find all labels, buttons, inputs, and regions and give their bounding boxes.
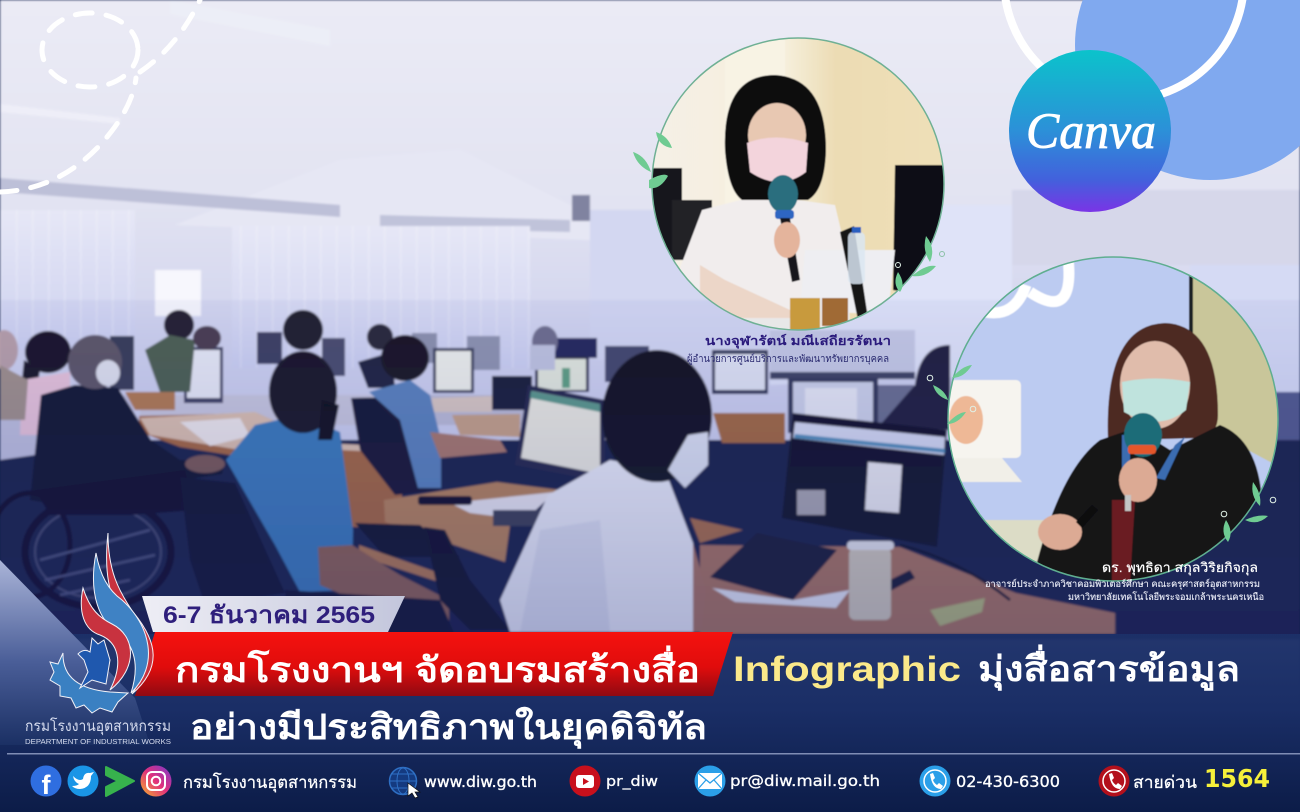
icon: facebook bbox=[30, 766, 62, 800]
footer: email: pr@diw.mail.go.th bbox=[730, 772, 880, 790]
speaker 2 caption: มหาวิทยาลัยเทคโนโลยีพระจอมเกล้าพระนครเหนือ bbox=[1068, 591, 1264, 603]
portrait: speaker 2 bbox=[945, 250, 1285, 590]
speaker 2 caption: อาจารย์ประจำภาควิชาคอมพิวเตอร์ศึกษา คณะครุศาสตร์อุตสาหกรรม bbox=[985, 578, 1260, 590]
seated participants bbox=[0, 335, 712, 635]
speaker 1 caption: ผู้อำนวยการศูนย์บริการและพัฒนาทรัพยากรบุคคล bbox=[687, 353, 889, 365]
footer: phone number: 02-430-6300 bbox=[956, 772, 1060, 791]
decorative blue circle bbox=[1075, 0, 1300, 180]
department logo bbox=[50, 533, 153, 713]
back row of monitors and people bbox=[0, 310, 950, 435]
curtains bbox=[0, 210, 530, 368]
icon: twitter bbox=[68, 766, 98, 796]
dark under-desk base bbox=[0, 440, 1300, 640]
speaker 2 caption: ดร. พุทธิดา สกุลวิริยกิจกุล bbox=[1102, 560, 1258, 576]
Canva logo: Canva bbox=[1026, 104, 1156, 160]
date banner bbox=[142, 596, 405, 632]
decorative white ring bbox=[1004, 0, 1244, 100]
footer: department name: กรมโรงงานอุตสาหกรรม bbox=[183, 772, 357, 793]
speaker 1 caption bbox=[687, 333, 891, 365]
icon: instagram bbox=[140, 766, 172, 796]
headline continued: มุ่งสื่อสารข้อมูล bbox=[978, 644, 1240, 691]
front monitors and desk objects bbox=[515, 385, 1010, 626]
icon: phone bbox=[920, 766, 950, 796]
desks bbox=[125, 392, 1115, 634]
decorative dashed circle motif bbox=[0, 0, 200, 192]
headline red banner: กรมโรงงานฯ จัดอบรมสร้างสื่อ bbox=[175, 645, 700, 690]
bottom navy band bbox=[0, 634, 1300, 812]
ceiling and ducts bbox=[0, 0, 590, 240]
footer: hotline number: 1564 bbox=[1204, 764, 1270, 793]
portrait ring 1 bbox=[652, 38, 944, 330]
speaker 1 caption: นางจุฬารัตน์ มณีเสถียรรัตนา bbox=[705, 333, 891, 349]
Canva logo bbox=[1009, 50, 1171, 212]
department name: กรมโรงงานอุตสาหกรรม bbox=[25, 717, 171, 736]
department name bbox=[25, 717, 171, 746]
headline red banner bbox=[135, 632, 733, 696]
icon: globe with cursor bbox=[390, 768, 420, 798]
icon: play store bbox=[106, 767, 134, 796]
leaves around portrait 2 bbox=[927, 365, 1276, 542]
icon: facebook: f bbox=[42, 770, 52, 800]
icon: youtube bbox=[570, 766, 600, 796]
footer: website: www.diw.go.th bbox=[424, 773, 537, 791]
footer: hotline label: สายด่วน bbox=[1133, 773, 1197, 792]
footer: youtube handle: pr_diw bbox=[606, 774, 658, 790]
headline second line: อย่างมีประสิทธิภาพในยุคดิจิทัล bbox=[190, 706, 707, 749]
speaker 2 caption bbox=[985, 560, 1264, 603]
blue photo tint bbox=[0, 300, 1300, 640]
headline Infographic: Infographic bbox=[733, 650, 961, 689]
light wedge at lower left bbox=[0, 560, 150, 745]
icon: hotline bbox=[1098, 766, 1130, 796]
portrait: speaker 1 bbox=[650, 36, 950, 332]
portrait ring 2 bbox=[948, 257, 1278, 581]
date banner: 6-7 ธันวาคม 2565 bbox=[163, 602, 375, 629]
department name: DEPARTMENT OF INDUSTRIAL WORKS bbox=[25, 737, 171, 746]
icon: mail bbox=[694, 766, 726, 796]
footer social icons bbox=[30, 766, 172, 800]
leaves around portrait 1 bbox=[633, 132, 944, 292]
